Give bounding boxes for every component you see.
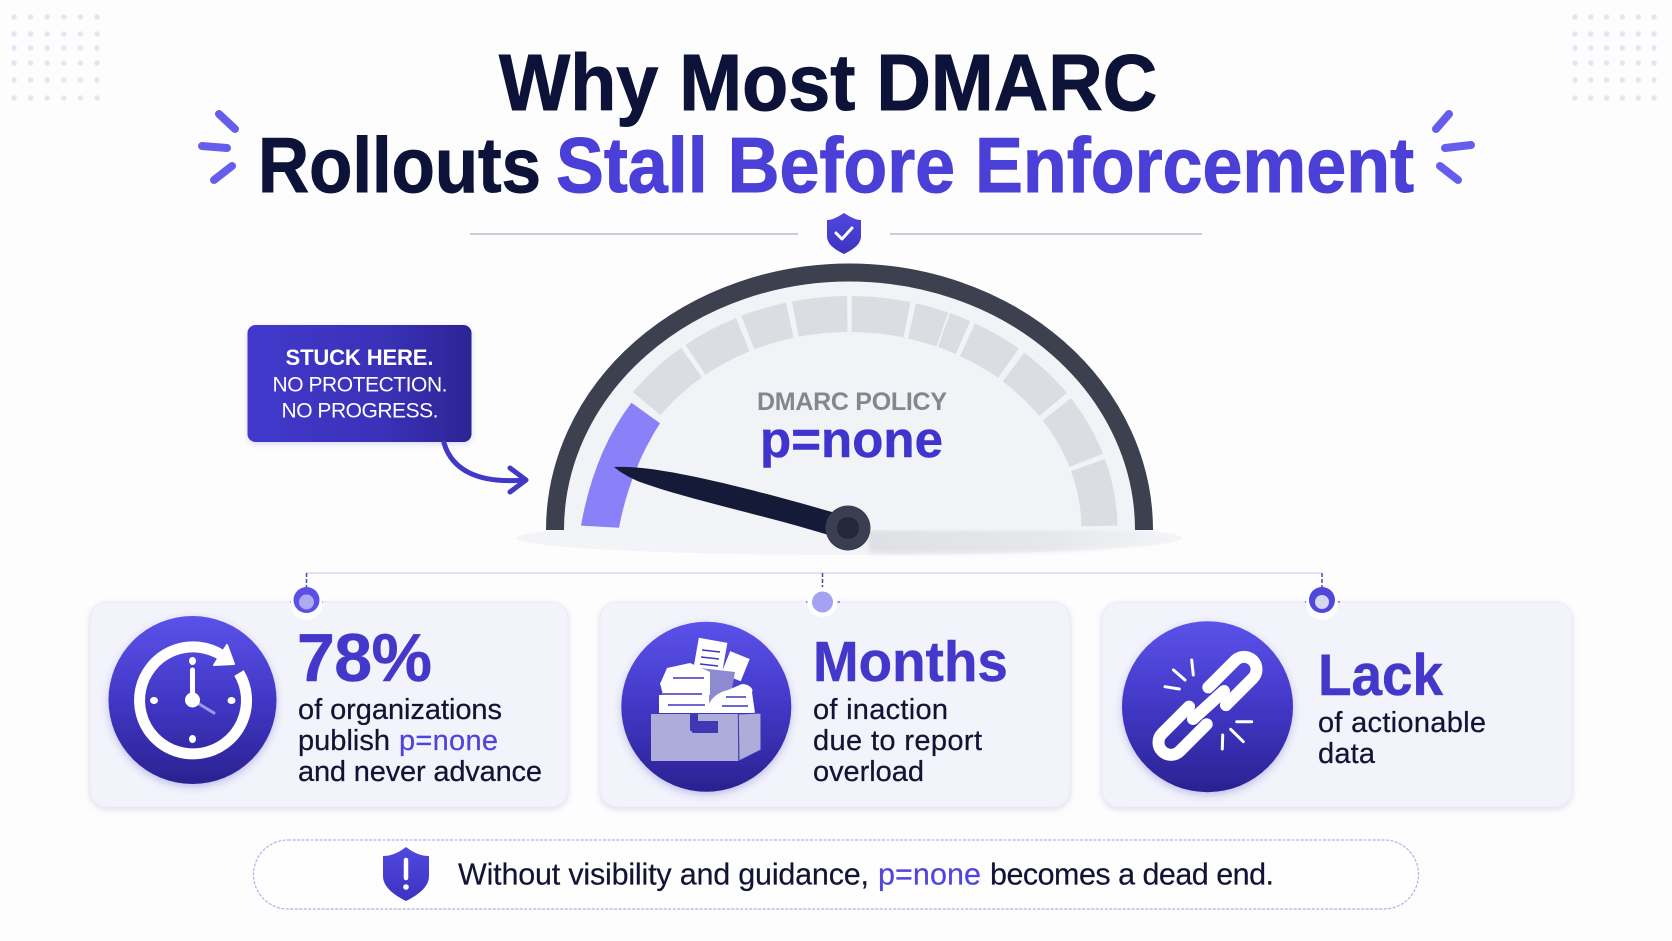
icon: clock with refresh arrow [108, 616, 276, 784]
panel: 78% of organizations [90, 587, 568, 807]
icon: overflowing report inbox [621, 622, 791, 792]
text: takeaway: p=none [878, 858, 981, 892]
text: takeaway: becomes a dead end. [990, 858, 1274, 892]
text: description: p=none [399, 725, 498, 757]
text: description: of organizations [298, 694, 502, 726]
icon: broken chain link [1122, 621, 1293, 792]
text: description [813, 694, 982, 788]
callout: stuck here: STUCK HERE. [286, 345, 434, 370]
gauge hub [826, 506, 870, 550]
callout: stuck here [248, 325, 600, 442]
text: takeaway: Without visibility and guidance, [458, 858, 869, 892]
title: Stall Before Enforcement [556, 121, 1414, 209]
text: description: due to report [813, 725, 982, 757]
text: takeaway [458, 858, 1274, 892]
panel: lack of actionable data [1102, 587, 1572, 807]
stat: Months: Months [813, 629, 1008, 693]
icon: shield with check [827, 213, 861, 254]
callout: bottom takeaway [254, 840, 1418, 909]
stat: Lack: Lack [1318, 643, 1444, 707]
gauge outer ring [555, 273, 1144, 530]
text: description: of actionable [1318, 707, 1486, 739]
gauge face [555, 273, 1144, 530]
stat: 78%: 78% [297, 620, 432, 696]
icon: right sparkle marks [1436, 114, 1471, 180]
text: description: of inaction [813, 694, 948, 726]
arrow: callout to gauge [444, 443, 526, 492]
icon: warning shield [383, 847, 429, 901]
text: description: overload [813, 756, 924, 788]
gauge label: DMARC POLICY [757, 388, 947, 416]
connector dot [290, 587, 323, 620]
text: description: publish [298, 725, 390, 757]
connector dot [806, 587, 840, 617]
title [258, 39, 1414, 209]
callout: stuck here: NO PROTECTION. [272, 374, 448, 396]
gauge value: p=none [760, 411, 943, 468]
gauge needle [614, 467, 832, 536]
gauge base shadow [516, 521, 1182, 555]
connector dot [1305, 587, 1340, 620]
text: description: data [1318, 738, 1376, 770]
panel: months of inaction [600, 587, 1070, 807]
gauge [516, 273, 1182, 555]
text: description: and never advance [298, 756, 542, 788]
callout: stuck here: NO PROGRESS. [282, 400, 438, 422]
gauge active purple segment [581, 403, 660, 528]
title: Rollouts [258, 122, 541, 209]
title: Why Most DMARC [499, 39, 1157, 127]
text: description [1318, 707, 1486, 770]
icon: left sparkle marks [202, 114, 235, 180]
text: description [298, 694, 542, 788]
gauge grey segments [647, 314, 1100, 526]
